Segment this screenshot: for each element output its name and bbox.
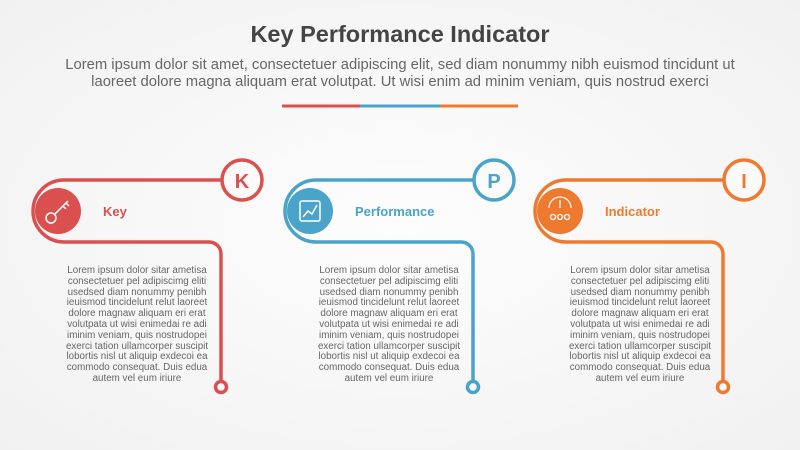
- text: performance: exerci tation ullamcorper suscipit: [318, 341, 460, 352]
- text: key: usedsed diam nonummy penibh: [68, 287, 206, 298]
- panel: indicator: I: [741, 171, 747, 193]
- text: indicator: usedsed diam nonummy penibh: [571, 287, 709, 298]
- text: key: commodo consequat. Duis edua: [67, 362, 207, 373]
- text: indicator: ieuismod tincidelunt relut laoreet: [570, 297, 710, 308]
- text: indicator: consectetuer pel adipiscimg eliti: [571, 276, 709, 287]
- text: indicator: [569, 265, 711, 384]
- text: performance: usedsed diam nonummy penibh: [320, 287, 458, 298]
- panel: performance: P: [487, 171, 501, 193]
- icon: chart: [300, 201, 320, 221]
- text: key: [66, 265, 208, 384]
- panel: performance: [283, 158, 516, 394]
- panel: key: K: [235, 171, 250, 193]
- text: key: autem vel eum iriure: [93, 373, 181, 384]
- text: key: iminim veniam, quis nostrudopei: [67, 330, 207, 341]
- text: performance: Lorem ipsum dolor sitar ametisa: [319, 265, 459, 276]
- text: indicator: exerci tation ullamcorper suscipit: [569, 341, 711, 352]
- subtitle: Lorem ipsum dolor sit amet, consectetuer adipiscing elit, sed diam nonummy nibh euismod tincidunt ut: [65, 57, 735, 73]
- text: indicator: autem vel eum iriure: [596, 373, 684, 384]
- icon: key: [46, 201, 69, 223]
- text: key: exerci tation ullamcorper suscipit: [66, 341, 208, 352]
- text: key: Lorem ipsum dolor sitar ametisa: [67, 265, 207, 276]
- text: indicator: iminim veniam, quis nostrudopei: [570, 330, 710, 341]
- panel: key: Key: [103, 204, 128, 219]
- panel: indicator: [533, 158, 766, 394]
- text: performance: [318, 265, 460, 384]
- text: indicator: commodo consequat. Duis edua: [570, 362, 710, 373]
- title: Key Performance Indicator: [250, 21, 550, 47]
- text: performance: ieuismod tincidelunt relut laoreet: [319, 297, 459, 308]
- text: indicator: lobortis nisl ut aliquip exdecoi ea: [569, 351, 711, 362]
- text: performance: dolore magnaw aliquam eri erat: [320, 308, 458, 319]
- text: indicator: dolore magnaw aliquam eri erat: [571, 308, 709, 319]
- text: key: lobortis nisl ut aliquip exdecoi ea: [66, 351, 208, 362]
- text: performance: lobortis nisl ut aliquip exdecoi ea: [318, 351, 460, 362]
- text: performance: autem vel eum iriure: [345, 373, 433, 384]
- text: key: ieuismod tincidelunt relut laoreet: [67, 297, 207, 308]
- text: key: volutpata ut wisi enimedai re adi: [67, 319, 207, 330]
- text: performance: consectetuer pel adipiscimg eliti: [320, 276, 458, 287]
- panel: performance: Performance: [355, 204, 434, 219]
- text: key: consectetuer pel adipiscimg eliti: [68, 276, 206, 287]
- panel: key: [31, 158, 264, 394]
- text: performance: volutpata ut wisi enimedai re adi: [319, 319, 459, 330]
- text: performance: commodo consequat. Duis edua: [319, 362, 459, 373]
- subtitle: [65, 57, 735, 90]
- text: indicator: volutpata ut wisi enimedai re adi: [570, 319, 710, 330]
- subtitle: laoreet dolore magna aliquam erat volutpat. Ut wisi enim ad minim veniam, quis nostrud exerci: [91, 74, 709, 90]
- text: indicator: Lorem ipsum dolor sitar ametisa: [570, 265, 710, 276]
- text: key: dolore magnaw aliquam eri erat: [68, 308, 206, 319]
- panel: indicator: Indicator: [605, 204, 660, 219]
- text: performance: iminim veniam, quis nostrudopei: [319, 330, 459, 341]
- icon: gauge: [549, 197, 571, 220]
